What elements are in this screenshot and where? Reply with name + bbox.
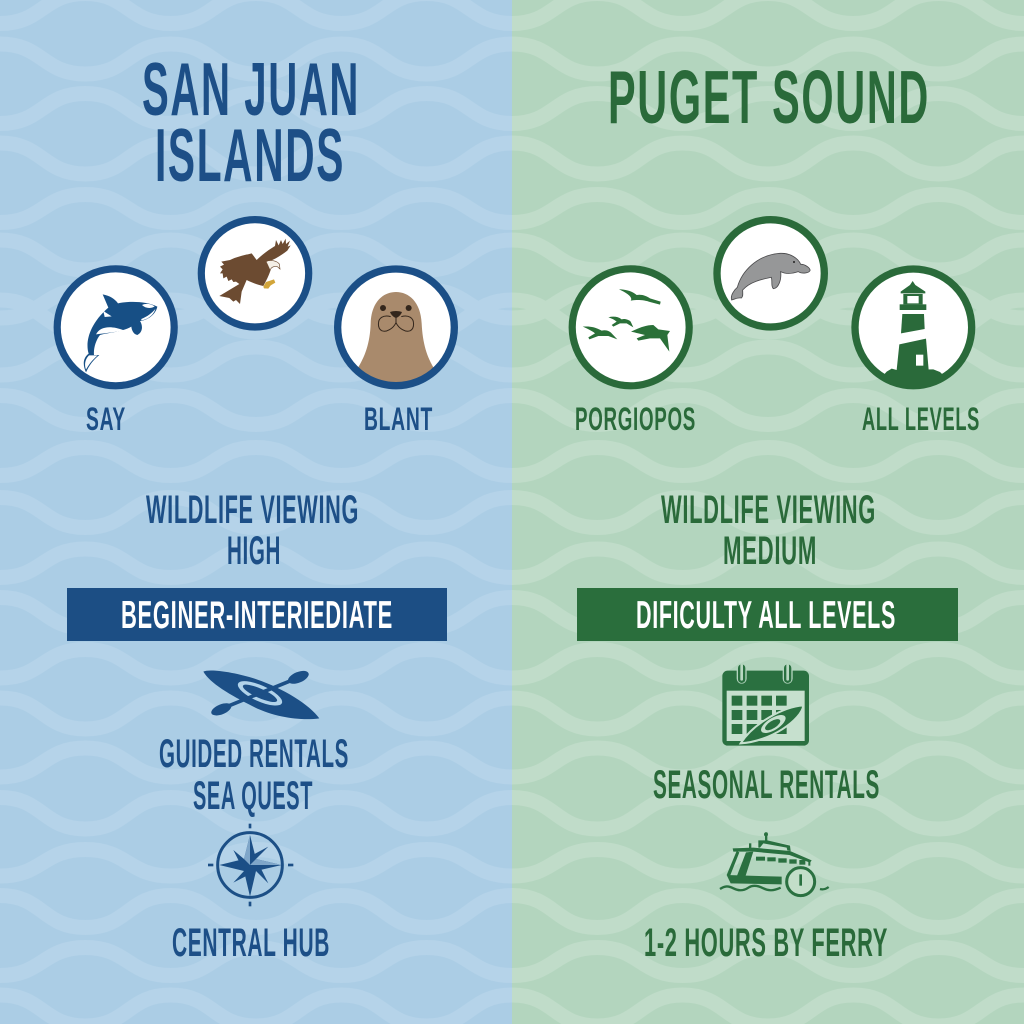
- icon: calendar with kayak: [722, 665, 809, 746]
- icon: kayak: [203, 668, 319, 719]
- label: Blant: BLANT: [364, 401, 433, 437]
- icon: compass: [208, 824, 293, 906]
- icon: ferry with clock: [720, 832, 829, 896]
- banner: difficulty: [67, 588, 447, 641]
- text: wildlife viewing high: WILDLIFE VIEWING: [146, 488, 359, 532]
- text: wildlife viewing high: HIGH: [227, 529, 281, 573]
- text: wildlife viewing high: [146, 488, 359, 573]
- text: wildlife viewing medium: MEDIUM: [723, 529, 817, 573]
- title: San Juan Islands: [142, 47, 360, 197]
- text: central hub: CENTRAL HUB: [172, 921, 330, 965]
- text: guided rentals sea quest: SEA QUEST: [193, 774, 313, 818]
- title: San Juan Islands: ISLANDS: [155, 113, 345, 197]
- icon: eagle: [201, 220, 309, 327]
- banner: difficulty: BEGINER-INTERIEDIATE: [121, 594, 393, 637]
- icon: orca: [57, 269, 174, 386]
- text: guided rentals sea quest: [159, 732, 349, 818]
- label: Porgiopos: PORGIOPOS: [575, 401, 696, 437]
- text: guided rentals sea quest: GUIDED RENTALS: [159, 732, 349, 776]
- label: Say: SAY: [86, 401, 126, 437]
- icon: seal: [338, 269, 454, 387]
- banner: difficulty: [577, 588, 958, 641]
- text: wildlife viewing medium: [661, 488, 876, 573]
- icon: manatee: [717, 220, 824, 327]
- icon: lighthouse: [855, 269, 972, 387]
- panel: Puget Sound: [512, 0, 1024, 1024]
- icon: birds: [572, 269, 689, 386]
- panel: San Juan Islands: [0, 0, 512, 1024]
- title: San Juan Islands: SAN JUAN: [142, 47, 360, 131]
